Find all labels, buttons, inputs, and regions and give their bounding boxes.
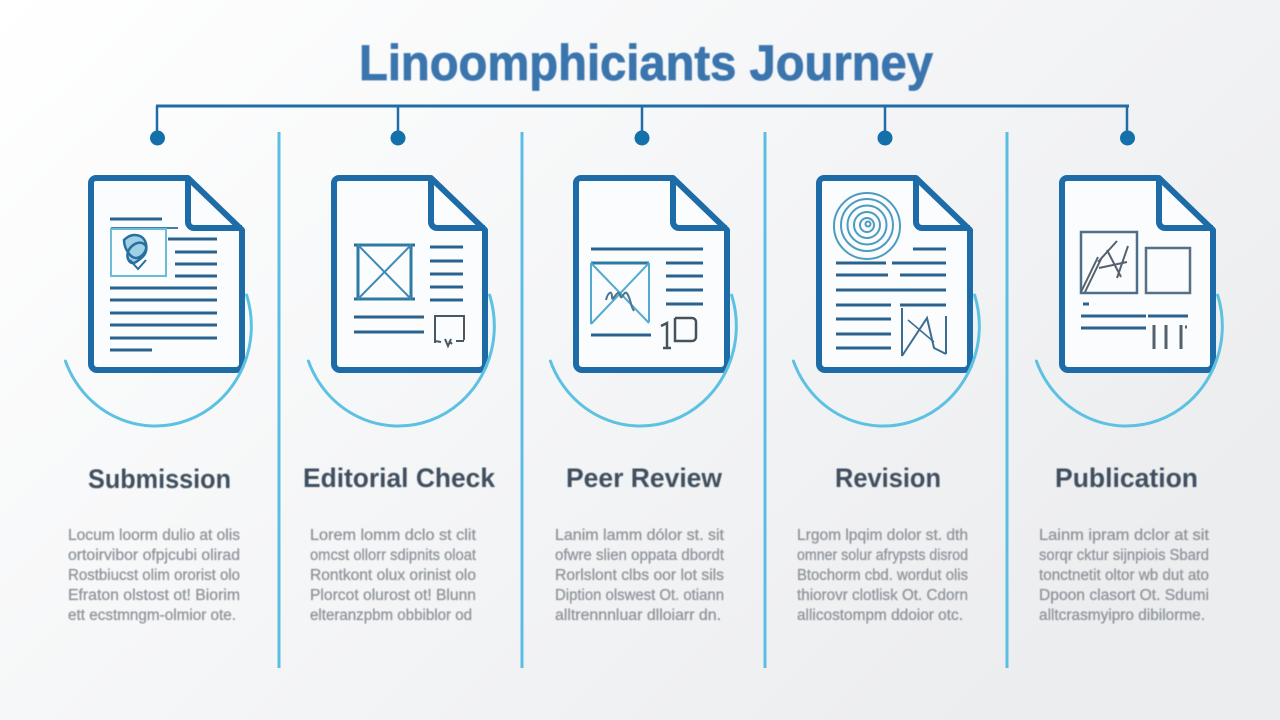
description: alltcrasmyipro dibilorme. <box>1039 607 1205 624</box>
description <box>555 527 725 624</box>
icon: document with crossed image and comment bubble <box>308 178 494 426</box>
panel: revision <box>793 178 979 624</box>
description: Dpoon clasort Ot. Sdumi <box>1039 587 1209 604</box>
panel: editorial check <box>303 178 496 624</box>
description: Lanim lamm dólor st. sit <box>555 527 725 544</box>
column dividers <box>279 132 1007 668</box>
heading: Editorial Check <box>303 463 496 493</box>
heading: Peer Review <box>566 463 723 493</box>
description: allicostompm ddoior otc. <box>797 607 963 624</box>
icon: document with crossed image and annotation <box>550 178 736 426</box>
description: omner solur afrypsts disrod <box>797 547 968 564</box>
icon: document with image and text lines <box>65 178 251 426</box>
description: Rorlslont clbs oor lot sils <box>555 567 724 584</box>
description: Btochorm cbd. wordut olis <box>797 567 968 584</box>
description <box>310 527 477 624</box>
description: ortoirvibor ofpjcubi olirad <box>68 547 240 564</box>
description: Rontkont olux orinist olo <box>310 567 476 584</box>
description: Lainm ipram dclor at sit <box>1039 527 1210 544</box>
description: tonctnetit oltor wb dut ato <box>1039 567 1209 584</box>
description <box>1039 527 1210 624</box>
description <box>797 527 968 624</box>
description: ofwre slien oppata dbordt <box>555 547 725 564</box>
title: Linoomphiciants Journey <box>359 35 933 91</box>
panel: publication <box>1036 178 1222 624</box>
icon: document with spiral and revision mark <box>793 178 979 426</box>
description: Rostbiucst olim ororist olo <box>68 567 240 584</box>
description: elteranzpbm obbiblor od <box>310 607 472 624</box>
description: Diption olswest Ot. otiann <box>555 587 724 604</box>
description: Locum loorm dulio at olis <box>68 527 240 544</box>
description: Plorcot olurost ot! Blunn <box>310 587 476 604</box>
description: Lorem lomm dclo st clit <box>310 527 477 544</box>
panel: submission <box>65 178 251 624</box>
description: sorqr cktur sijnpiois Sbard <box>1039 547 1209 564</box>
description: ett ecstmngm-olmior ote. <box>68 607 236 624</box>
description: thiorovr clotlisk Ot. Cdorn <box>797 587 968 604</box>
connector: timeline bracket with five nodes <box>150 106 1135 146</box>
description: omcst ollorr sdipnits oloat <box>310 547 477 564</box>
panel: peer review <box>550 178 736 624</box>
heading: Submission <box>88 464 231 494</box>
description <box>68 527 240 624</box>
description: Lrgom lpqim dolor st. dth <box>797 527 968 544</box>
heading: Publication <box>1055 463 1198 493</box>
heading: Revision <box>835 463 941 493</box>
icon: document with sketch and bars <box>1036 178 1222 426</box>
description: Efraton olstost ot! Biorim <box>68 587 240 604</box>
description: alltrennnluar dlloiarr dn. <box>555 607 721 624</box>
